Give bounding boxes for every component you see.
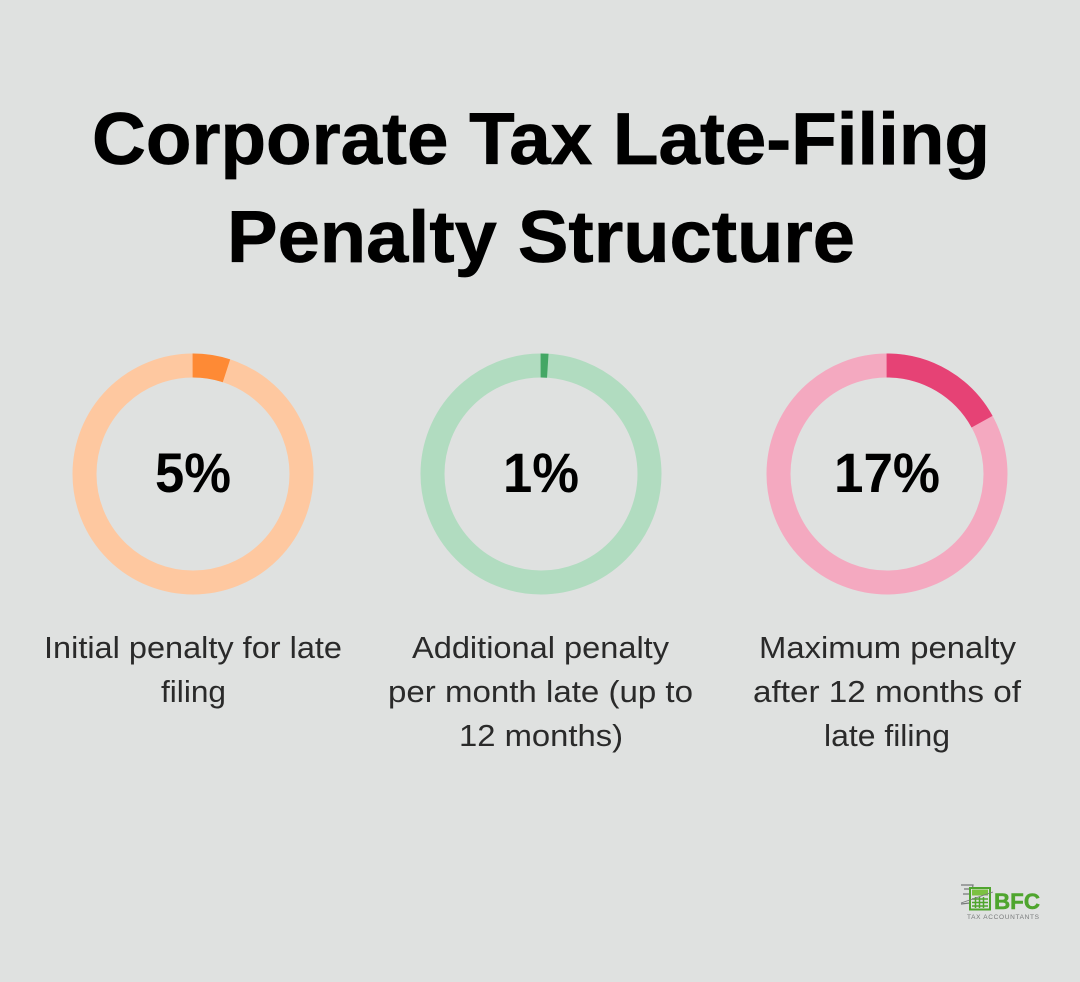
description: initial penalty: filing xyxy=(161,674,226,709)
title: Corporate Tax Late-Filing xyxy=(92,99,990,180)
panel: 17% maximum penalty xyxy=(753,366,1021,753)
donut chart: 5% xyxy=(84,366,302,582)
logo: BFC Tax Accountants xyxy=(961,885,1040,921)
title xyxy=(92,99,990,278)
description: maximum penalty: Maximum penalty xyxy=(759,630,1017,665)
description: additional penalty: 12 months) xyxy=(459,718,623,753)
donut chart: 17% xyxy=(778,366,996,582)
description: additional penalty xyxy=(388,630,693,753)
description: initial penalty xyxy=(44,630,342,709)
description: maximum penalty: late filing xyxy=(824,718,950,753)
title: Penalty Structure xyxy=(227,197,855,278)
description: maximum penalty: after 12 months of xyxy=(753,674,1021,709)
description: additional penalty: Additional penalty xyxy=(412,630,670,665)
description: maximum penalty xyxy=(753,630,1021,753)
description: initial penalty: Initial penalty for late xyxy=(44,630,342,665)
panel: 1% additional penalty xyxy=(388,366,693,753)
value: 17%: 17% xyxy=(834,441,940,504)
description: additional penalty: per month late (up to xyxy=(388,674,693,709)
panel: 5% initial penalty xyxy=(44,366,342,709)
value: 1%: 1% xyxy=(503,441,579,504)
logo wordmark: BFC xyxy=(994,889,1040,914)
value: 5%: 5% xyxy=(155,441,231,504)
icon: calculator with papers xyxy=(961,885,993,910)
donut chart: 1% xyxy=(432,366,650,582)
logo tagline: TAX ACCOUNTANTS xyxy=(967,914,1040,921)
